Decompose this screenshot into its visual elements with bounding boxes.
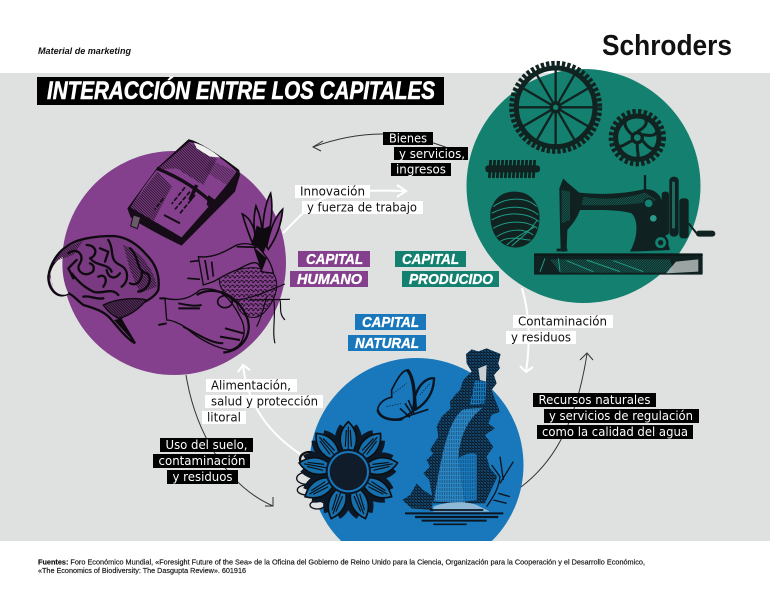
label: alimentacion: litoral <box>207 410 241 424</box>
label: bienes y servicios: ingresos <box>396 162 446 176</box>
circle: produced capital <box>466 69 700 303</box>
front petals <box>298 422 399 521</box>
icon: sewing machine <box>534 175 715 275</box>
icon: small gear wheel <box>611 111 664 164</box>
bulb and soil <box>219 268 277 317</box>
footer: sources: «The Economics of Biodiversity: The Dasgupta Review». 601916 <box>38 566 246 575</box>
label: uso del suelo: contaminación <box>158 453 246 468</box>
arrow: natural resources <box>521 353 593 487</box>
label: contaminacion y residuos: y residuos <box>511 330 571 344</box>
label: capital producido: PRODUCIDO <box>409 271 493 288</box>
circle: natural capital <box>310 358 524 541</box>
label: capital humano: CAPITAL <box>306 251 363 268</box>
icon: waterfall <box>402 348 513 524</box>
bushes <box>402 483 433 510</box>
icon: ball of yarn <box>490 192 540 248</box>
label: capital producido <box>395 251 499 288</box>
label: alimentacion: Alimentación, <box>211 378 291 392</box>
base <box>534 253 703 275</box>
footer: sources <box>38 558 645 575</box>
label: bienes y servicios: Bienes <box>389 130 427 146</box>
label: marketing material: Material de marketing <box>38 46 132 56</box>
label: contaminacion y residuos: Contaminación <box>518 314 607 328</box>
background band <box>0 73 770 541</box>
label: capital natural <box>348 314 426 352</box>
logo: Schroders: Schroders <box>602 30 732 62</box>
arrow: food, health and protection <box>238 365 300 454</box>
hand wheel <box>669 177 679 237</box>
icon: butterfly <box>378 370 434 420</box>
footer: sources: Fuentes: Foro Económico Mundial, «Foresight Future of the Sea» de la Oficina del Gobierno de Reino Unido para la Ciencia, Organización para la Cooperación y el Desarrollo Económico, <box>38 558 645 566</box>
arrow: goods and services <box>313 134 467 155</box>
label: contaminacion y residuos <box>506 314 613 344</box>
arm and column <box>559 178 670 252</box>
label: uso del suelo: Uso del suelo, <box>166 437 248 452</box>
icon: gloved hands holding a plant <box>158 193 290 353</box>
label: recursos naturales <box>533 392 699 439</box>
arrow: land use <box>186 375 273 506</box>
arrow: innovation and workforce <box>283 185 406 233</box>
label: alimentacion <box>202 378 323 424</box>
icon: sunflower <box>297 422 399 521</box>
icon: brain <box>48 236 159 343</box>
label: uso del suelo <box>153 437 253 484</box>
label: innovacion: y fuerza de trabajo <box>307 200 417 214</box>
label: capital humano <box>290 251 370 288</box>
upper glove <box>198 244 273 285</box>
label: innovacion: Innovación <box>300 184 365 198</box>
title: INTERACCIÓN ENTRE LOS CAPITALES <box>47 76 435 105</box>
falling water <box>434 408 483 503</box>
foliage and rock <box>423 348 501 503</box>
pool <box>433 502 490 512</box>
leaves <box>242 193 283 252</box>
label: capital natural: CAPITAL <box>362 314 419 331</box>
seed disc <box>326 449 371 494</box>
outer petals <box>297 452 325 509</box>
label: bienes y servicios <box>383 130 468 176</box>
label: recursos naturales: y servicios de regulación <box>549 408 693 423</box>
stalk and roots <box>237 284 290 343</box>
icon: large gear wheel <box>512 63 600 151</box>
lower glove <box>165 289 244 350</box>
label: bienes y servicios: y servicios, <box>399 146 465 161</box>
label: capital producido: CAPITAL <box>402 251 459 268</box>
label: recursos naturales: como la calidad del agua <box>542 424 688 439</box>
label: uso del suelo: y residuos <box>172 469 232 484</box>
label: recursos naturales: Recursos naturales <box>538 392 650 407</box>
needle <box>557 230 567 252</box>
circle: human capital <box>62 151 286 375</box>
label: capital humano: HUMANO <box>297 271 362 288</box>
label: capital natural: NATURAL <box>355 335 419 352</box>
crank <box>689 223 713 233</box>
icon: book <box>127 139 240 246</box>
back petals <box>300 423 396 520</box>
label: alimentacion: salud y protección <box>211 394 318 408</box>
arrow: pollution and waste <box>520 288 533 372</box>
label: innovacion <box>295 184 423 214</box>
tree <box>487 457 513 507</box>
icon: spring <box>485 160 540 178</box>
